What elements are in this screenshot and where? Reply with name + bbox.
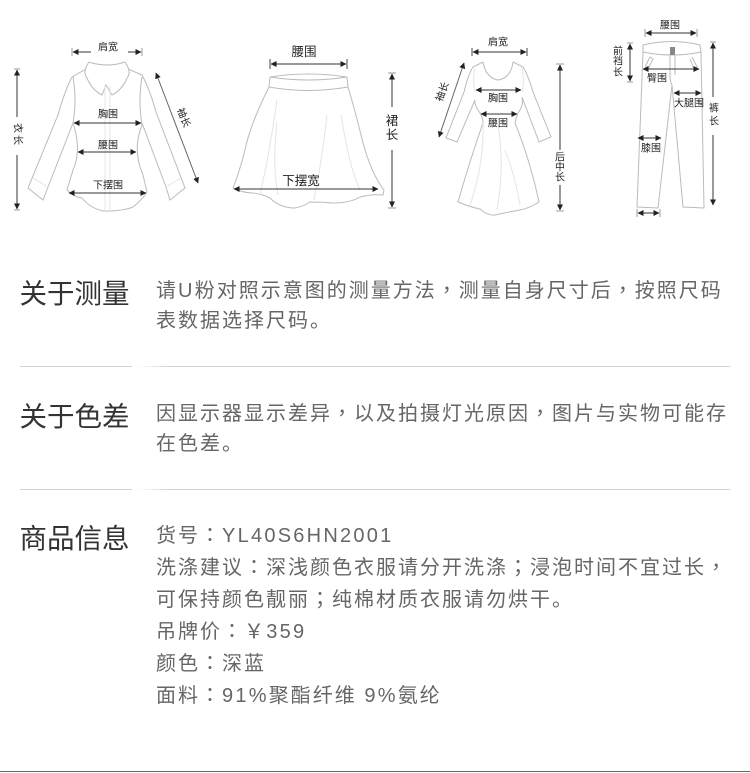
dress waist <box>481 114 517 130</box>
trousers crotch: 前 <box>613 44 623 58</box>
skirt waist <box>270 45 347 69</box>
trousers knee <box>638 138 661 154</box>
trousers thigh: 大腿围 <box>674 96 704 110</box>
shirt length: 衣 <box>12 123 24 133</box>
dress sleeve: 袖长 <box>433 80 452 103</box>
skirt hem: 下摆宽 <box>282 173 320 188</box>
text: product information: 吊牌价：￥359 <box>156 615 306 644</box>
text: product information: 可保持颜色靓丽；纯棉材质衣服请勿烘干。 <box>156 583 574 612</box>
dress back length: 后 <box>555 152 565 164</box>
trousers hip: 臀围 <box>647 72 667 84</box>
trousers crotch: 裆 <box>613 54 623 68</box>
skirt waist: 腰围 <box>291 45 317 59</box>
text: about measuring <box>156 274 723 332</box>
heading: about measuring: 关于测量 <box>20 278 130 309</box>
trousers belt tab <box>670 47 675 55</box>
skirt length: 裙 <box>386 114 399 128</box>
dress back length: 中 <box>555 160 565 174</box>
text: about colour difference: 在色差。 <box>156 433 244 455</box>
text: about measuring: 表数据选择尺码。 <box>156 310 332 332</box>
garment measurement diagrams <box>12 20 719 217</box>
trousers waist <box>645 20 697 37</box>
shirt shoulder width <box>72 40 142 56</box>
trousers hip <box>643 69 699 84</box>
shirt shoulder width: 肩宽 <box>98 40 118 54</box>
section: about colour difference <box>20 397 728 455</box>
shirt sleeve <box>156 73 198 183</box>
diagram: dress <box>433 36 565 215</box>
bottom rule <box>0 771 750 772</box>
diagram: skirt <box>233 45 399 208</box>
trousers knee: 膝围 <box>641 142 661 154</box>
trousers length: 长 <box>709 116 719 128</box>
skirt length: 长 <box>386 128 399 142</box>
shirt hem: 下摆围 <box>93 178 123 192</box>
text: product information: 货号：YL40S6HN2001 <box>156 519 394 548</box>
heading: about colour difference: 关于色差 <box>20 401 130 432</box>
divider <box>20 489 730 490</box>
dress shoulder: 肩宽 <box>488 36 508 48</box>
dress waist: 腰围 <box>488 118 508 130</box>
dress chest <box>476 90 521 104</box>
shirt chest <box>74 108 141 123</box>
diagram: trousers <box>613 20 719 217</box>
dress back length: 长 <box>555 172 565 184</box>
text: product information: 洗涤建议：深浅颜色衣服请分开洗涤；浸泡时间不宜过长， <box>156 551 728 580</box>
trousers crotch: 长 <box>613 66 623 78</box>
heading: product information: 商品信息 <box>20 523 130 554</box>
shirt sleeve: 袖长 <box>174 106 194 129</box>
text: about measuring: 请U粉对照示意图的测量方法，测量自身尺寸后，按照尺码 <box>156 274 723 303</box>
shirt length: 长 <box>12 135 24 145</box>
shirt waist <box>78 140 136 152</box>
text: about colour difference <box>156 397 728 455</box>
text: product information: 颜色：深蓝 <box>156 647 266 676</box>
shirt hem <box>69 178 146 193</box>
dress shoulder <box>472 36 527 56</box>
trousers hem <box>637 209 660 217</box>
shirt waist: 腰围 <box>98 140 118 152</box>
section: about measuring <box>20 274 723 332</box>
dress sleeve <box>433 63 464 137</box>
text: product information <box>156 519 728 708</box>
dress chest: 胸围 <box>488 92 508 104</box>
skirt length <box>386 73 399 208</box>
trousers thigh <box>674 93 704 110</box>
divider <box>20 366 730 367</box>
dress back length <box>555 64 565 211</box>
diagram: shirt <box>12 40 198 211</box>
trousers crotch <box>613 43 633 82</box>
shirt chest: 胸围 <box>98 108 118 120</box>
shirt length <box>12 69 24 210</box>
trousers waist: 腰围 <box>660 20 680 32</box>
text: product information: 面料：91%聚酯纤维 9%氨纶 <box>156 679 442 708</box>
trousers length <box>709 42 719 205</box>
trousers length: 裤 <box>709 102 719 114</box>
text: about colour difference: 因显示器显示差异，以及拍摄灯光原因，图片与实物可能存 <box>156 397 728 426</box>
section: product information <box>20 519 728 708</box>
